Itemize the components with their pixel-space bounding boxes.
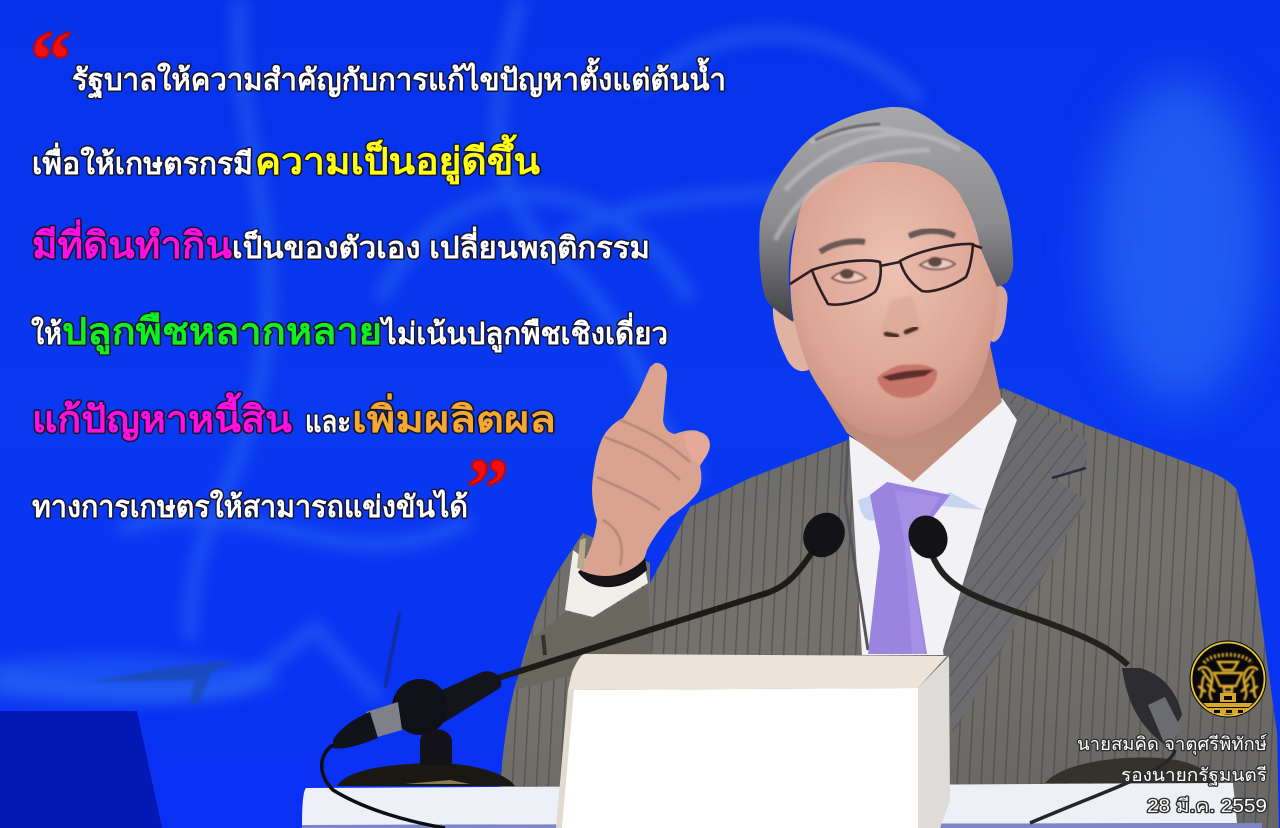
line 5: แก้ปัญหาหนี้สิน — [32, 392, 292, 441]
left microphone stem — [460, 548, 815, 690]
lectern top — [568, 654, 947, 690]
opening quotation mark: “ — [30, 14, 72, 107]
microphones — [322, 505, 1215, 828]
quote text — [30, 14, 726, 535]
line 3: มีที่ดินทำกิน — [32, 219, 232, 266]
line 4: ปลูกพืชหลากหลาย — [62, 311, 382, 355]
dark shapes in the background graphic — [90, 661, 235, 705]
lectern front — [558, 688, 918, 828]
tie — [868, 482, 950, 654]
line 4 — [31, 311, 668, 355]
nostrils — [886, 328, 916, 336]
caption: speaker name, title and date — [1077, 734, 1267, 816]
left ear — [773, 307, 810, 371]
jacket buttons — [543, 635, 545, 655]
left microphone base — [337, 763, 515, 786]
closing quotation mark: ” — [467, 442, 509, 535]
line 2: ความเป็นอยู่ดีขึ้น — [255, 134, 540, 185]
line 3 — [32, 219, 650, 266]
line 5: เพิ่มผลิตผล — [352, 393, 556, 440]
dark stage block — [0, 711, 162, 828]
glasses — [790, 244, 982, 305]
hand pointing — [580, 363, 710, 578]
face — [790, 162, 997, 437]
shirt — [849, 398, 1017, 655]
shirt cuff — [565, 550, 648, 617]
right ear — [989, 285, 1008, 342]
left microphone head — [795, 505, 853, 565]
desk surface — [302, 783, 1237, 825]
government seal — [1190, 640, 1266, 718]
right microphone clip — [1122, 668, 1182, 745]
mouth — [877, 364, 937, 398]
line 5 — [32, 392, 556, 441]
line 6: ทางการเกษตรให้สามารถแข่งขันได้ — [32, 489, 468, 524]
caption: speaker name, title and date: 28 มี.ค. 2559 — [1147, 796, 1267, 816]
hair strands — [775, 128, 960, 240]
microphone cable — [322, 745, 445, 828]
right microphone stem — [932, 555, 1128, 665]
hair — [759, 107, 1013, 322]
line 2 — [32, 134, 540, 185]
lectern side — [918, 656, 950, 828]
eyebrows — [820, 231, 955, 252]
collar shadow — [858, 492, 983, 521]
suit jacket — [498, 388, 1279, 828]
line 5: และ — [305, 406, 351, 439]
lapels — [845, 388, 1087, 735]
right microphone base — [1045, 757, 1215, 783]
right microphone head — [901, 509, 955, 565]
line 1: รัฐบาลให้ความสำคัญกับการแก้ไขปัญหาตั้งแต่ต้นน้ำ — [72, 57, 726, 100]
line 4: ให้ — [31, 316, 62, 351]
neck — [815, 345, 1002, 482]
podium — [302, 654, 1262, 828]
line 2: เพื่อให้เกษตรกรมี — [32, 142, 253, 181]
line 3: เป็นของตัวเอง เปลี่ยนพฤติกรรม — [232, 226, 650, 265]
caption: speaker name, title and date: นายสมคิด จาตุศรีพิทักษ์ — [1077, 734, 1267, 755]
left microphone clip — [333, 671, 501, 748]
right microphone cable — [1030, 750, 1175, 823]
caption: speaker name, title and date: รองนายกรัฐมนตรี — [1121, 765, 1267, 786]
line 4: ไม่เน้นปลูกพืชเชิงเดี่ยว — [379, 312, 668, 353]
speaker: man in grey suit — [498, 107, 1279, 828]
suit sleeve front — [515, 586, 652, 690]
wristwatch — [578, 558, 647, 587]
eyes — [832, 257, 955, 282]
nose — [881, 295, 922, 339]
